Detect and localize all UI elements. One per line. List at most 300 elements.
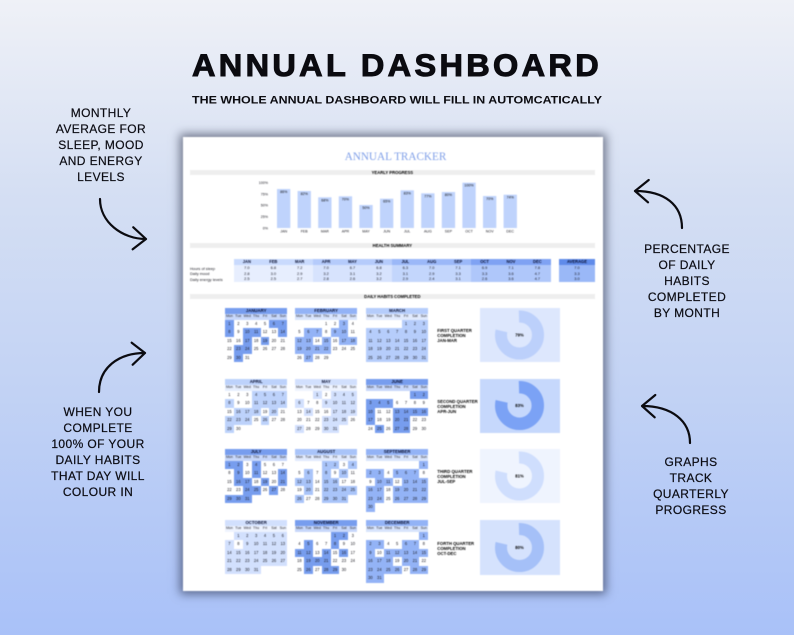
calendar: June: 4	[378, 400, 380, 405]
calendar: May: 14	[306, 409, 311, 414]
calendar: March: Fri	[404, 314, 408, 318]
calendar: November: 20	[315, 558, 320, 563]
calendar: November: 24	[350, 558, 355, 563]
monthly columns: 4.7	[535, 271, 540, 276]
calendar: June: 24	[368, 426, 373, 431]
calendar: May: 11	[342, 400, 346, 405]
calendar: March: 29	[404, 355, 408, 360]
calendar: May: 6	[298, 400, 301, 405]
calendar: May: 31	[333, 426, 337, 431]
calendar: March: 23	[413, 346, 417, 351]
section heading: yearly progress	[190, 170, 595, 175]
calendar: April: 16	[236, 409, 241, 414]
calendar: January: 3	[246, 320, 248, 326]
calendar: January: 20	[272, 338, 276, 343]
calendar: February: Tue	[305, 314, 311, 318]
calendar: August: 7	[316, 470, 318, 475]
calendar: May: 20	[297, 417, 302, 422]
calendar: August: 31	[342, 496, 346, 501]
callout: quarterly graphs: GRAPHS	[664, 455, 718, 469]
calendar: March: 19	[377, 346, 382, 351]
callout: percentage by month: BY MONTH	[654, 306, 720, 320]
calendar: May: Sun	[350, 385, 356, 389]
calendar: June: 3	[369, 400, 372, 405]
calendar: November: Fri	[333, 526, 337, 530]
calendar: March: 13	[386, 338, 390, 343]
calendar: June: 19	[386, 417, 390, 422]
calendar: May: 30	[324, 426, 328, 431]
calendar: August: 15	[324, 479, 328, 484]
calendar: January: 30	[236, 355, 241, 360]
calendar: June: 1	[414, 392, 416, 396]
row labels: Daily mood	[190, 271, 209, 276]
calendar: October: 1	[237, 532, 239, 538]
calendar: August: 17	[342, 479, 346, 484]
calendar: February: 29	[324, 355, 328, 360]
calendar: June: 11	[377, 409, 381, 414]
calendar: December: Sat	[412, 526, 418, 530]
calendar: October	[224, 520, 288, 574]
calendar: February: 14	[315, 338, 320, 343]
calendar: June: 6	[396, 400, 398, 405]
calendar: October: 7	[228, 541, 231, 546]
calendar: September	[365, 448, 429, 513]
bar chart: yearly progress: 50%	[261, 204, 269, 208]
calendar: May: 10	[333, 400, 337, 405]
calendar: October: 26	[272, 558, 276, 563]
bar chart: yearly progress: 77%	[424, 194, 432, 198]
calendar: November: Mon	[296, 526, 303, 530]
calendar: September: 22	[422, 487, 426, 492]
calendar: June: 25	[377, 426, 382, 431]
calendar: March: 9	[414, 329, 416, 334]
calendar: June: 23	[422, 417, 426, 422]
calendar: November: 1	[334, 532, 336, 538]
calendar: June: 28	[404, 426, 408, 431]
calendar: August: 30	[333, 496, 337, 501]
calendar: October: 6	[282, 532, 284, 538]
calendar: June: Tue	[376, 385, 382, 389]
average column: 3.3	[574, 271, 580, 276]
calendar: November: 16	[342, 550, 346, 555]
calendar: February: 25	[350, 346, 355, 351]
section heading: health summary	[190, 243, 595, 248]
calendar: July: Tue	[235, 455, 241, 459]
monthly columns: NOV	[507, 259, 515, 264]
monthly columns: 7.8	[535, 265, 540, 270]
calendar: May: Fri	[333, 385, 337, 389]
monthly columns: 6.9	[482, 265, 487, 270]
calendar: July: 4	[255, 462, 257, 466]
calendar: December: 31	[377, 575, 382, 580]
calendar: September: 7	[414, 470, 416, 475]
calendar: March: 11	[368, 338, 373, 343]
callout: completed days: THAT DAY WILL	[51, 469, 145, 483]
bar chart: yearly progress: 68%	[321, 198, 329, 202]
calendar: July: 25	[254, 487, 258, 492]
calendar: October: 22	[236, 558, 241, 563]
calendar: April: 2	[237, 392, 239, 396]
calendar: August: 26	[297, 496, 302, 501]
calendar: March: 31	[422, 355, 426, 360]
monthly columns: 2.8	[323, 276, 329, 281]
calendar: April: Thu	[253, 385, 259, 389]
calendar: December: Thu	[394, 526, 400, 530]
calendar: January: 10	[245, 329, 250, 334]
calendar: August: 23	[333, 487, 337, 492]
calendar: March: Mon	[367, 314, 374, 318]
calendar: February: 19	[297, 346, 302, 351]
bar chart: yearly progress: 80%	[445, 193, 453, 197]
calendar: June: Thu	[394, 385, 400, 389]
calendar: July: 28	[280, 487, 285, 492]
donut chart: second quarter: 83%	[515, 403, 524, 408]
calendar: November: 10	[350, 541, 355, 546]
calendar: October: 5	[273, 532, 275, 538]
calendar: January: 19	[263, 338, 267, 343]
monthly columns: 3.3	[482, 271, 487, 276]
bar chart: yearly progress: DEC	[506, 230, 514, 234]
calendar: March: 26	[377, 355, 382, 360]
calendar: August: 2	[334, 462, 336, 466]
calendar: January: 31	[245, 355, 250, 360]
callout: percentage by month: HABITS	[664, 274, 710, 288]
calendar: February: 21	[315, 346, 320, 351]
calendar: March: 28	[395, 355, 399, 360]
calendar: October: 4	[264, 532, 266, 538]
calendar: December: Mon	[367, 526, 374, 530]
calendar: May: 16	[324, 409, 328, 414]
calendar: December: 2	[369, 541, 372, 546]
calendar: April: Wed	[244, 385, 251, 389]
calendar: October: OCTOBER	[245, 520, 267, 525]
calendar: March: 6	[387, 329, 389, 334]
calendar: August: Tue	[305, 455, 311, 459]
calendar: September: 2	[369, 470, 372, 475]
calendar: August: 22	[324, 487, 328, 492]
calendar: September: 3	[378, 470, 380, 475]
calendar: June: Sat	[412, 385, 418, 389]
monthly columns: 3.1	[403, 271, 408, 276]
calendar: July: Sat	[271, 455, 277, 459]
calendar: July: 22	[227, 487, 232, 492]
calendar: June: 21	[404, 417, 408, 422]
calendar: February: 24	[342, 346, 346, 351]
calendar: January: Sat	[271, 314, 277, 318]
calendar: March: 7	[396, 329, 398, 334]
calendar: June: 9	[423, 400, 425, 405]
calendar: January: JANUARY	[246, 308, 266, 313]
calendar: July: 3	[246, 462, 248, 466]
calendar: July: 13	[272, 470, 276, 475]
calendar: March	[366, 308, 428, 362]
monthly columns: 2.5	[244, 276, 250, 281]
bar chart: yearly progress: 0%	[263, 226, 269, 230]
calendar: April: 1	[228, 392, 231, 396]
calendar: August: 5	[298, 470, 301, 475]
calendar: March: 12	[377, 338, 382, 343]
calendar: March: 27	[386, 355, 390, 360]
calendar: October: 11	[263, 541, 267, 546]
monthly columns: SEP	[454, 259, 462, 264]
callout: completed days: COMPLETE	[63, 421, 133, 435]
monthly columns: 7.1	[455, 265, 461, 270]
calendar: April: Tue	[235, 385, 241, 389]
calendar: June: 18	[377, 417, 382, 422]
calendar: February: 9	[334, 329, 336, 334]
calendar: January	[224, 307, 288, 363]
calendar: March: 20	[386, 346, 390, 351]
calendar: September: Wed	[385, 455, 392, 459]
calendar: April: 21	[280, 409, 285, 414]
calendar: July: Sun	[280, 455, 286, 459]
calendar: August: 6	[307, 470, 309, 475]
calendar: October: 23	[245, 558, 250, 563]
calendar: December: 11	[386, 550, 390, 555]
calendar: January: 27	[272, 346, 276, 351]
calendar: August: Sun	[350, 455, 356, 459]
donut chart: first quarter	[480, 308, 560, 362]
calendar: July: 30	[236, 496, 241, 501]
calendar: August: 10	[342, 470, 346, 475]
calendar: January: Tue	[235, 314, 241, 318]
calendar: May: 3	[334, 392, 336, 396]
monthly columns: 3.3	[455, 271, 461, 276]
calendar: September: 9	[369, 479, 372, 484]
callout: completed days: 100% OF YOUR	[51, 437, 145, 451]
monthly columns: 2.8	[244, 271, 250, 276]
monthly columns: 7.2	[297, 265, 302, 270]
calendar: April: 17	[245, 409, 250, 414]
bar chart: yearly progress: JAN	[280, 230, 287, 234]
callout: completed days: DAILY HABITS	[55, 453, 141, 467]
calendar: October: Mon	[226, 526, 233, 530]
calendar: January: 24	[245, 346, 250, 351]
monthly columns: MAY	[348, 259, 357, 264]
calendar: March: Wed	[385, 314, 392, 318]
calendar: November: 12	[306, 550, 311, 555]
monthly columns: 2.9	[403, 276, 408, 281]
calendar: November: 30	[342, 567, 346, 572]
calendar: August: 4	[352, 462, 354, 466]
callout: monthly averages: SLEEP, MOOD	[58, 138, 144, 152]
calendar: November: Sat	[341, 526, 347, 530]
calendar: April: Mon	[226, 385, 233, 389]
calendar: January: 22	[227, 346, 232, 351]
calendar: July: 17	[245, 479, 250, 484]
calendar: February: 11	[351, 329, 355, 334]
calendar: February: 5	[298, 329, 301, 334]
calendar: April: 3	[246, 392, 248, 396]
calendar: November: 29	[333, 567, 337, 572]
calendar: June: 2	[423, 392, 425, 396]
calendar: August: 25	[350, 487, 355, 492]
calendar: May: 7	[307, 400, 309, 405]
calendar: January: 18	[254, 338, 258, 343]
quarter label: first: COMPLETION	[437, 333, 466, 338]
calendar: November: 26	[306, 567, 311, 572]
calendar: August: 29	[324, 496, 328, 501]
monthly columns: 3.2	[376, 276, 382, 281]
calendar: May: 12	[350, 400, 355, 405]
calendar: May: Tue	[305, 385, 311, 389]
calendar: September: 26	[395, 496, 399, 501]
calendar: October: 30	[245, 567, 250, 572]
calendar: January: 21	[280, 338, 285, 343]
calendar: September: 13	[404, 479, 408, 484]
calendar: January: Thu	[253, 314, 259, 318]
monthly columns: OCT	[480, 259, 489, 264]
section heading: daily habits completed	[190, 294, 595, 299]
calendar: August: 28	[315, 496, 320, 501]
donut chart: third quarter: 81%	[515, 474, 524, 478]
calendar: August: 13	[306, 479, 311, 484]
calendar: October: 19	[272, 550, 276, 555]
calendar: July: Mon	[226, 455, 233, 459]
calendar: August: 20	[306, 487, 311, 492]
calendar: December: 23	[368, 567, 373, 572]
callout: monthly averages: LEVELS	[77, 170, 125, 184]
calendar: October: 3	[255, 532, 257, 538]
calendar: August: 24	[342, 487, 346, 492]
calendar: June: 29	[413, 426, 417, 431]
calendar: January: 11	[254, 329, 258, 334]
calendar: November: 2	[343, 532, 345, 538]
calendar: January: Mon	[226, 314, 233, 318]
monthly columns: 3.1	[455, 276, 461, 281]
calendar: August: 12	[297, 479, 302, 484]
calendar: August: 18	[350, 479, 355, 484]
monthly columns: 2.9	[297, 271, 302, 276]
calendar: March: 4	[369, 329, 372, 334]
calendar: January: 12	[263, 329, 267, 334]
arrow: to health summary	[98, 198, 148, 250]
calendar: May: 2	[325, 392, 327, 396]
calendar: July: 16	[236, 479, 241, 484]
callout: percentage by month	[644, 242, 730, 320]
calendar: April: 15	[227, 409, 232, 414]
calendar: May: Wed	[314, 385, 321, 389]
calendar: January: Fri	[263, 314, 267, 318]
calendar: February: 7	[316, 329, 318, 334]
calendar: May: 9	[325, 400, 327, 405]
calendar: September: 4	[387, 470, 389, 475]
calendar: September: Sat	[412, 455, 418, 459]
calendar: January: 26	[263, 346, 267, 351]
calendar: June: 15	[413, 409, 417, 414]
calendar: December: 8	[423, 541, 425, 546]
calendar: April: 22	[227, 417, 232, 422]
bar chart: yearly progress: 70%	[342, 197, 350, 201]
calendar: November: 19	[306, 558, 311, 563]
calendar: September: 5	[396, 470, 398, 475]
callout: quarterly graphs: TRACK	[670, 471, 712, 485]
bar chart: yearly progress: 65%	[383, 200, 391, 204]
calendar: October: 17	[254, 550, 258, 555]
calendar: July: 14	[280, 470, 285, 475]
calendar: December: 7	[414, 541, 416, 546]
calendar: July: 7	[282, 462, 284, 466]
calendar: October: Thu	[253, 526, 259, 530]
calendar: November: 6	[316, 541, 318, 546]
donut chart: first quarter: 79%	[515, 332, 524, 338]
calendar: April: 5	[264, 392, 266, 396]
calendar: April: 20	[272, 409, 276, 414]
calendar: April: 28	[280, 417, 285, 422]
calendar: October: 28	[227, 567, 232, 572]
calendar: June: 14	[404, 409, 408, 414]
monthly columns: 3.0	[271, 271, 276, 276]
calendar: November: 25	[297, 567, 302, 572]
calendar: April: 30	[236, 426, 241, 431]
calendar: February: Sun	[350, 314, 356, 318]
calendar: January: 7	[282, 320, 284, 326]
calendar: December: 13	[404, 550, 408, 555]
calendar: February: 28	[315, 355, 320, 360]
monthly columns: APR	[322, 259, 330, 264]
callout: quarterly graphs	[653, 455, 729, 517]
calendar: July: 23	[236, 487, 241, 492]
callout: completed days	[51, 405, 145, 499]
bar chart: yearly progress: 100%	[464, 184, 474, 188]
calendar: April: 7	[282, 392, 284, 396]
sheet heading: ANNUAL TRACKER	[345, 151, 446, 163]
bar chart: yearly progress: SEP	[445, 230, 453, 234]
calendar: September: Thu	[394, 455, 400, 459]
calendar: October: Tue	[235, 526, 241, 530]
calendar: April: 12	[263, 400, 267, 405]
calendar: June: Wed	[385, 385, 392, 389]
calendar: October: 24	[254, 558, 258, 563]
calendar: May: 27	[297, 426, 302, 431]
calendar: May: 23	[324, 417, 328, 422]
calendar: December: 18	[386, 558, 390, 563]
bar chart: yearly progress	[258, 181, 518, 234]
calendar: May: Mon	[296, 385, 303, 389]
calendar: September: 27	[404, 496, 408, 501]
calendar: August: 8	[325, 470, 327, 475]
monthly columns: 4.7	[535, 276, 540, 281]
calendar: April: 27	[272, 417, 276, 422]
quarter label: fourth: COMPLETION	[437, 546, 466, 551]
calendar: March: 24	[422, 346, 426, 351]
calendar: July: 20	[272, 479, 276, 484]
calendar: March: Sun	[421, 314, 427, 318]
calendar: April: 23	[236, 417, 241, 422]
calendar: May: 25	[342, 417, 346, 422]
calendar: July: 2	[237, 462, 239, 466]
subtitle: THE WHOLE ANNUAL DASHBOARD WILL FILL IN AUTOMCATICALLY	[192, 94, 602, 106]
calendar: December: 4	[387, 541, 389, 546]
calendar: April: 11	[254, 400, 258, 405]
monthly columns: 7.0	[323, 265, 329, 270]
calendar: January: 15	[227, 338, 232, 343]
bar chart: yearly progress: 82%	[301, 192, 309, 196]
calendar: December: 5	[396, 541, 398, 546]
calendar: December: 16	[368, 558, 373, 563]
calendar: October: Sun	[280, 526, 286, 530]
calendar: September: 11	[386, 479, 390, 484]
calendar: December: 10	[377, 550, 382, 555]
calendar: August: 14	[315, 479, 320, 484]
calendar: January: 4	[255, 320, 257, 326]
bar chart: yearly progress: FEB	[301, 230, 308, 234]
calendar: April: 13	[272, 400, 276, 405]
calendar: July: 6	[273, 462, 275, 466]
bar chart: yearly progress: APR	[342, 230, 349, 234]
calendar: September: 21	[413, 487, 417, 492]
calendar: June: 20	[395, 417, 399, 422]
